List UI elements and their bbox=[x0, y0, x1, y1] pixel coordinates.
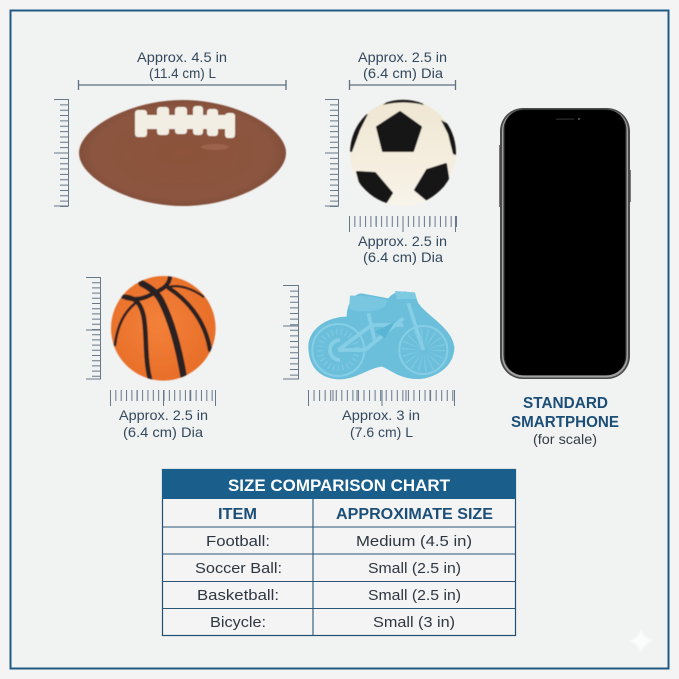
soccer ball horizontal ruler bbox=[349, 216, 457, 232]
basketball label: (6.4 cm) Dia bbox=[123, 424, 203, 440]
football laces bbox=[135, 106, 235, 138]
smartphone caption: STANDARD bbox=[523, 395, 608, 412]
smartphone illustration bbox=[499, 108, 631, 379]
column headers bbox=[218, 506, 493, 523]
smartphone caption: SMARTPHONE bbox=[511, 414, 619, 431]
soccer ball top label: Approx. 2.5 in bbox=[358, 49, 447, 65]
bicycle label: Approx. 3 in bbox=[342, 407, 420, 423]
soccer ball top label bbox=[358, 49, 447, 81]
basketball vertical ruler bbox=[86, 277, 101, 380]
row: soccer ball: Small (2.5 in) bbox=[368, 560, 461, 577]
football dimension line bbox=[78, 80, 286, 90]
bicycle illustration bbox=[308, 291, 454, 379]
row: basketball: Basketball: bbox=[197, 587, 279, 604]
soccer ball vertical ruler bbox=[325, 99, 339, 207]
basketball illustration bbox=[111, 276, 216, 382]
basketball horizontal ruler bbox=[110, 390, 217, 406]
soccer ball bottom label: (6.4 cm) Dia bbox=[363, 249, 443, 265]
row: soccer ball bbox=[195, 560, 461, 577]
row: basketball: Small (2.5 in) bbox=[368, 587, 461, 604]
soccer ball bottom label bbox=[358, 233, 447, 265]
smartphone caption bbox=[511, 395, 619, 447]
column headers: ITEM bbox=[218, 506, 257, 523]
bicycle label bbox=[342, 407, 420, 440]
row: soccer ball: Soccer Ball: bbox=[195, 560, 282, 577]
column headers: APPROXIMATE SIZE bbox=[336, 506, 493, 523]
football illustration bbox=[79, 100, 286, 206]
row: bicycle bbox=[210, 614, 455, 631]
soccer ball illustration bbox=[349, 98, 457, 204]
panel: smartphone bbox=[499, 108, 631, 447]
panel: basketball bbox=[86, 276, 217, 440]
basketball label: Approx. 2.5 in bbox=[119, 407, 208, 423]
smartphone caption: (for scale) bbox=[533, 431, 597, 447]
row: basketball bbox=[197, 587, 461, 604]
table body bbox=[162, 470, 516, 636]
panel: football bbox=[54, 49, 286, 207]
football ruler bbox=[54, 99, 69, 207]
bicycle label: (7.6 cm) L bbox=[350, 424, 413, 440]
table title bar: SIZE COMPARISON CHART bbox=[228, 476, 451, 495]
bicycle vertical ruler bbox=[283, 285, 299, 380]
row: football: Football: bbox=[206, 533, 270, 550]
row: bicycle: Bicycle: bbox=[210, 614, 266, 631]
table title bar bbox=[162, 469, 516, 499]
icon: sparkle bbox=[628, 628, 654, 654]
row: bicycle: Small (3 in) bbox=[373, 614, 455, 631]
panel: bicycle bbox=[283, 285, 456, 440]
soccer ball top label: (6.4 cm) Dia bbox=[363, 65, 443, 81]
football width label: Approx. 4.5 in bbox=[137, 49, 227, 65]
basketball label bbox=[119, 407, 208, 440]
size comparison table bbox=[162, 469, 516, 636]
bicycle horizontal ruler bbox=[308, 390, 456, 406]
soccer ball bottom label: Approx. 2.5 in bbox=[358, 233, 447, 249]
row: football: Medium (4.5 in) bbox=[356, 533, 472, 550]
football width label: (11.4 cm) L bbox=[149, 65, 216, 81]
panel: soccer ball bbox=[325, 49, 460, 265]
football width label bbox=[137, 49, 227, 81]
soccer ball dimension line bbox=[350, 80, 456, 90]
row: football bbox=[206, 533, 472, 550]
